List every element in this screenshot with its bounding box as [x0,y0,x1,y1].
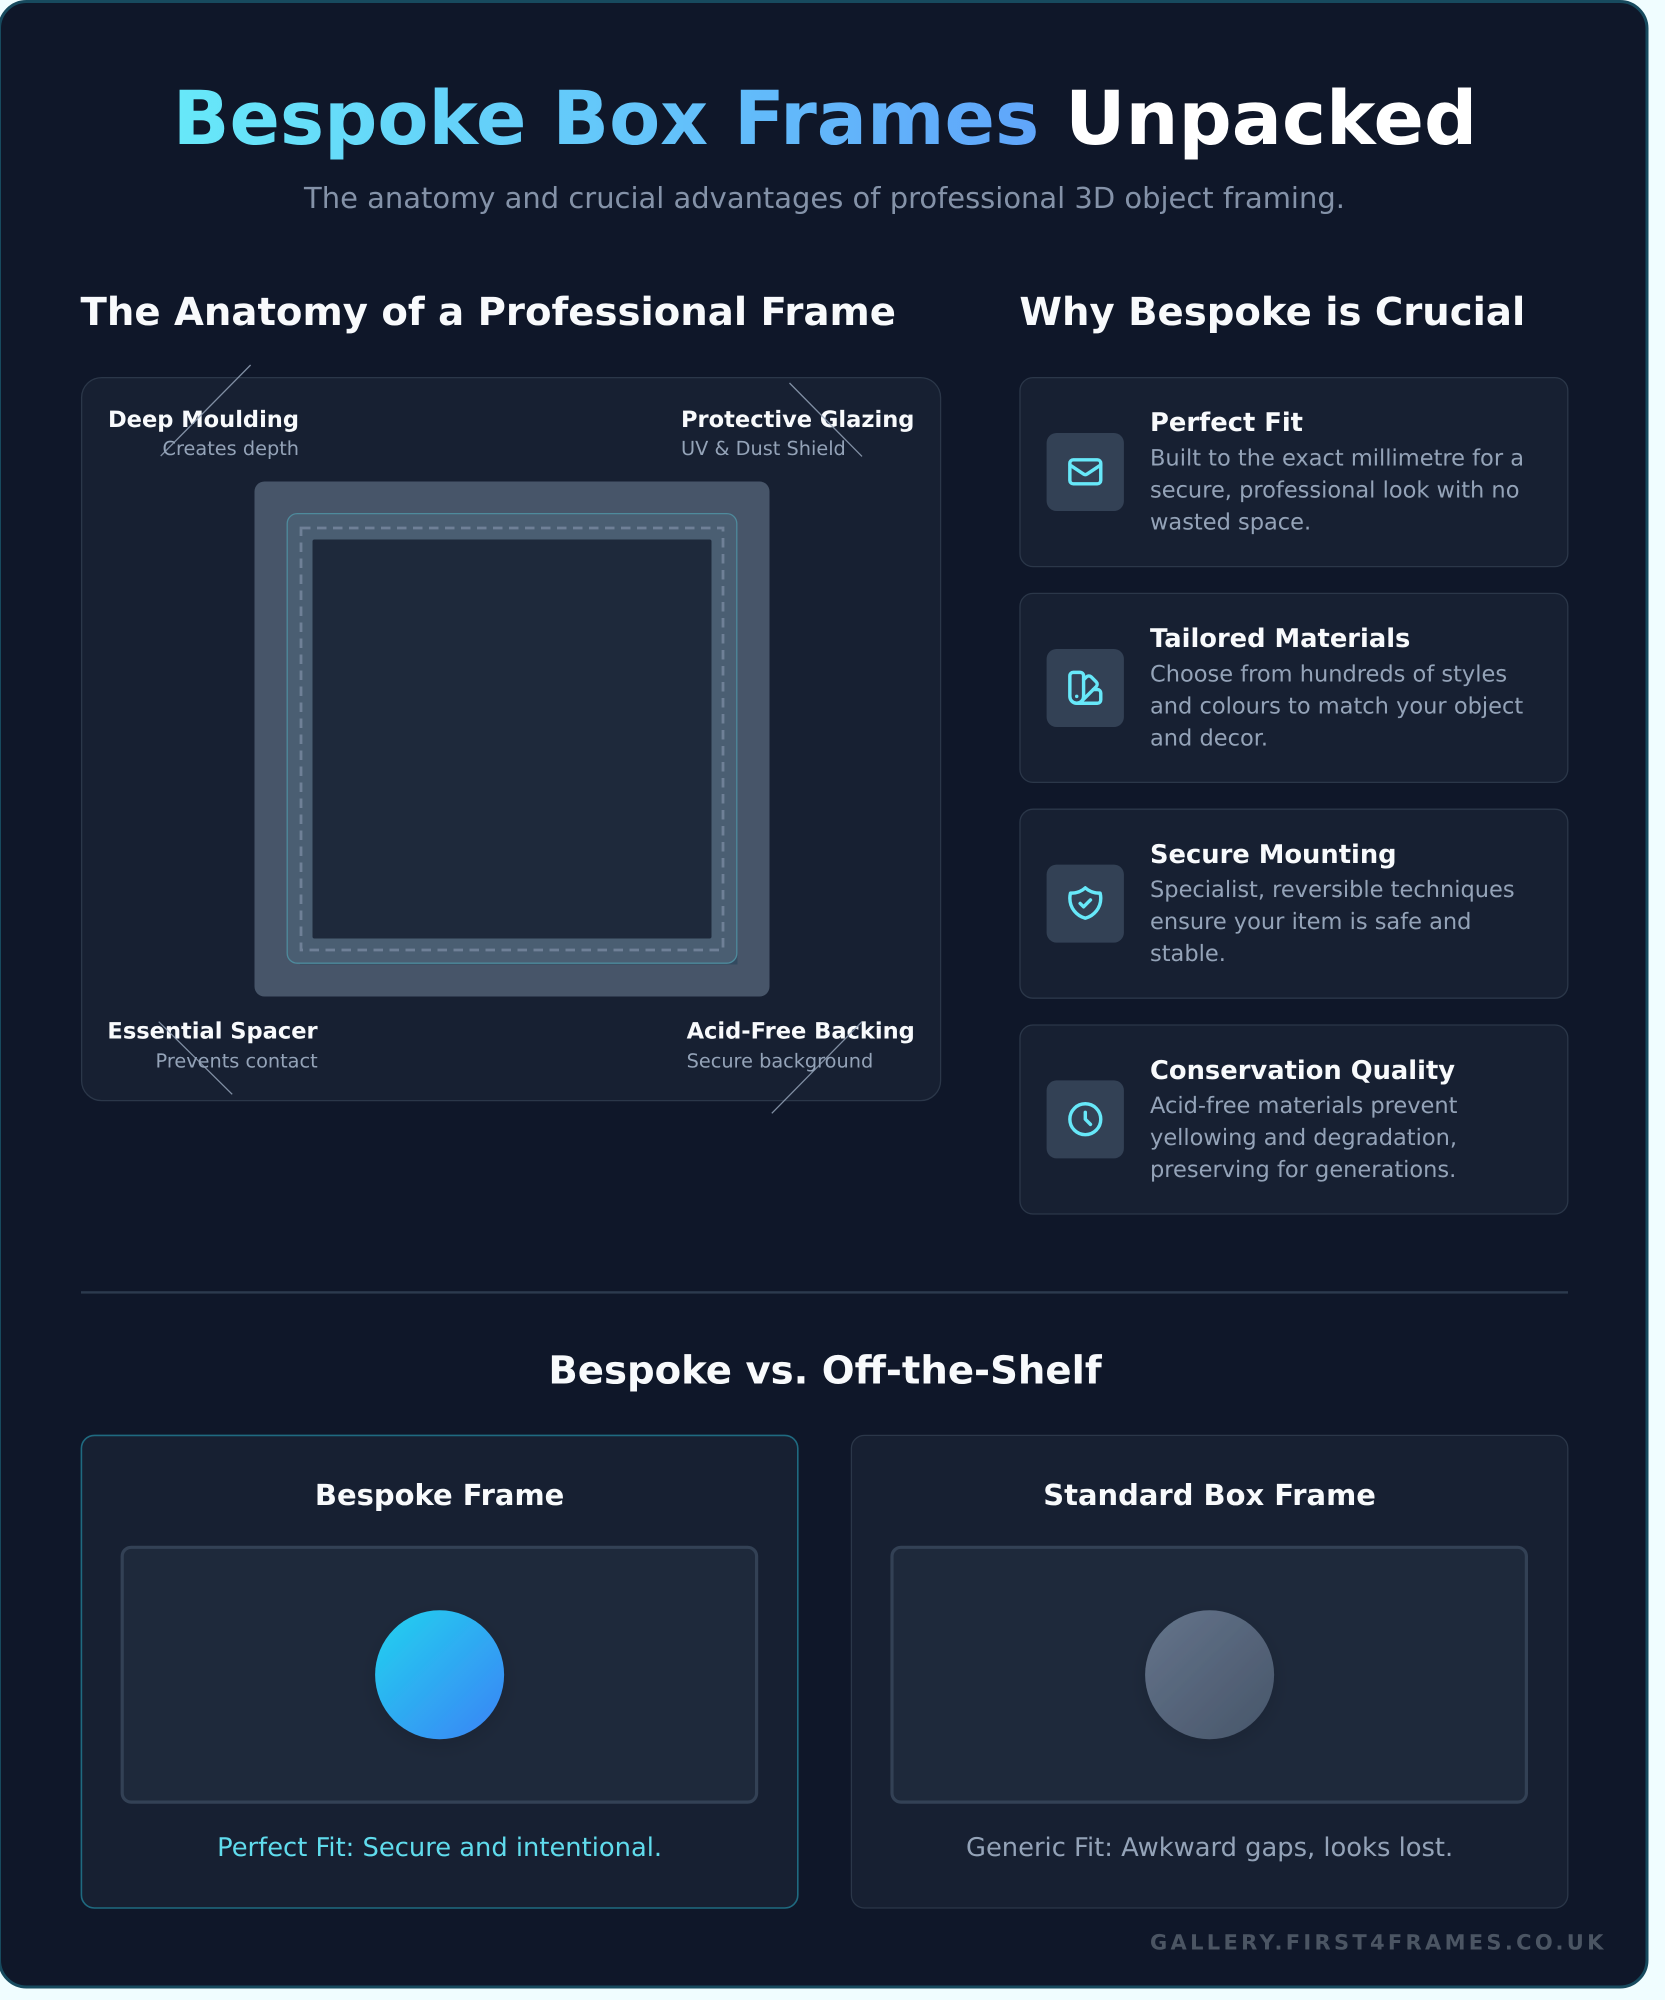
card: conservation quality: yellowing and degradation, [1150,1125,1457,1151]
card: conservation quality: Conservation Quality [1150,1056,1455,1086]
panel: bespoke frame [81,1435,798,1908]
card: secure mounting: Specialist, reversible techniques [1150,877,1515,903]
frame diagram [254,482,770,996]
label: deep moulding: Deep Moulding [108,407,299,433]
icon: shield check [1047,865,1124,943]
footer url: GALLERY.FIRST4FRAMES.CO.UK [1150,1931,1607,1955]
heading: why bespoke: Why Bespoke is Crucial [1019,290,1525,335]
card: tailored materials [1020,593,1568,782]
heading: bespoke frame: Bespoke Frame [315,1478,564,1512]
caption: bespoke: Perfect Fit: Secure and intentional. [217,1833,662,1863]
card: conservation quality: Acid-free materials prevent [1150,1093,1458,1119]
illustration: perfect fit [122,1547,757,1802]
label: acid-free backing [687,1019,915,1113]
card: secure mounting: stable. [1150,941,1226,967]
label: acid-free backing: Acid-Free Backing [687,1019,915,1045]
card: tailored materials: and decor. [1150,725,1268,751]
card: tailored materials: and colours to match your object [1150,693,1523,719]
icon: clock [1047,1080,1124,1158]
card: tailored materials: Choose from hundreds of styles [1150,661,1507,687]
illustration: generic fit [892,1547,1526,1802]
label: deep moulding: Creates depth [163,437,299,460]
panel: standard box frame [851,1435,1568,1908]
label: deep moulding [108,365,299,460]
card: secure mounting: ensure your item is safe and [1150,909,1471,935]
icon: envelope [1047,433,1124,511]
card: secure mounting [1020,809,1568,998]
heading: comparison: Bespoke vs. Off-the-Shelf [548,1349,1103,1394]
card: perfect fit [1020,378,1568,567]
card: tailored materials: Tailored Materials [1150,624,1410,654]
icon: colour swatch [1047,649,1124,727]
label: essential spacer [107,1019,319,1094]
label: protective glazing: UV & Dust Shield [681,437,846,460]
label: essential spacer: Essential Spacer [107,1019,319,1045]
label: protective glazing: Protective Glazing [681,407,914,433]
heading: anatomy: The Anatomy of a Professional Frame [80,290,896,335]
card: conservation quality [1020,1025,1568,1214]
label: essential spacer: Prevents contact [156,1050,318,1073]
card: secure mounting: Secure Mounting [1150,840,1397,870]
caption: standard: Generic Fit: Awkward gaps, looks lost. [966,1833,1453,1863]
panel: anatomy diagram [82,365,941,1113]
card: perfect fit: Built to the exact millimetre for a [1150,445,1524,471]
title: Bespoke Box Frames Unpacked [173,75,1477,162]
card: perfect fit: secure, professional look with no [1150,477,1519,503]
subtitle: The anatomy and crucial advantages of professional 3D object framing. [303,181,1345,215]
label: protective glazing [681,383,914,460]
card: perfect fit: Perfect Fit [1150,408,1303,438]
label: acid-free backing: Secure background [687,1050,873,1073]
card: perfect fit: wasted space. [1150,509,1311,535]
card: conservation quality: preserving for generations. [1150,1157,1456,1183]
heading: standard frame: Standard Box Frame [1043,1478,1376,1512]
